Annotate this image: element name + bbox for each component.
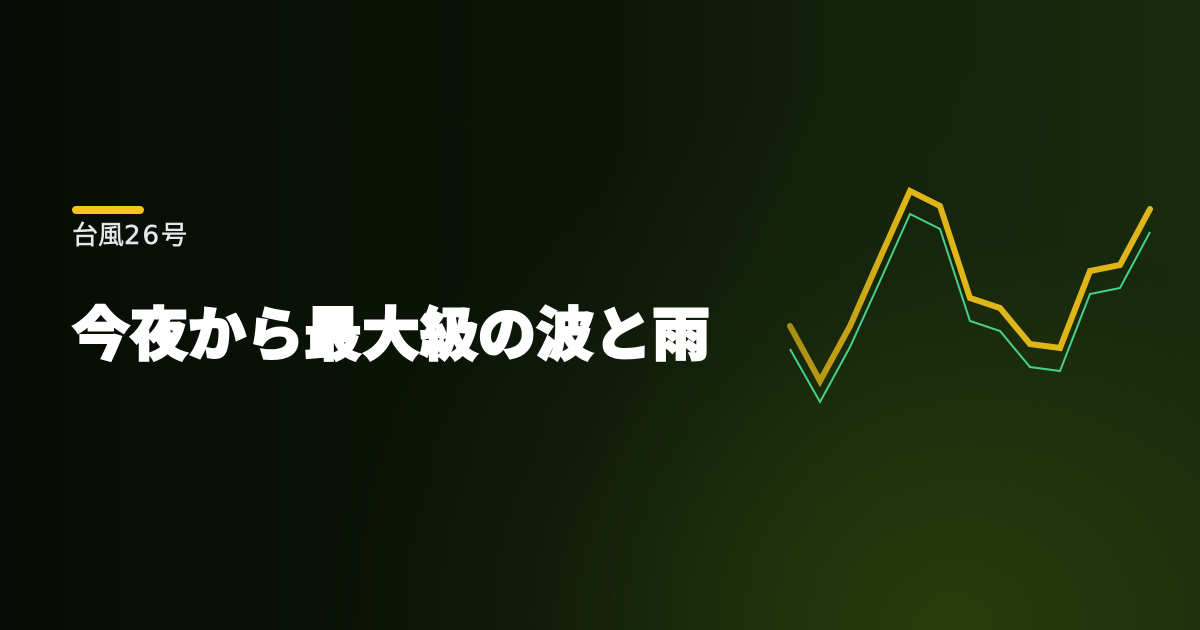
yellow line series bbox=[790, 191, 1150, 381]
green line series bbox=[790, 214, 1150, 402]
title: 今夜から最大級の波と雨 bbox=[72, 303, 710, 368]
kicker label: 台風26号 bbox=[72, 221, 187, 251]
accent bar bbox=[72, 206, 144, 214]
